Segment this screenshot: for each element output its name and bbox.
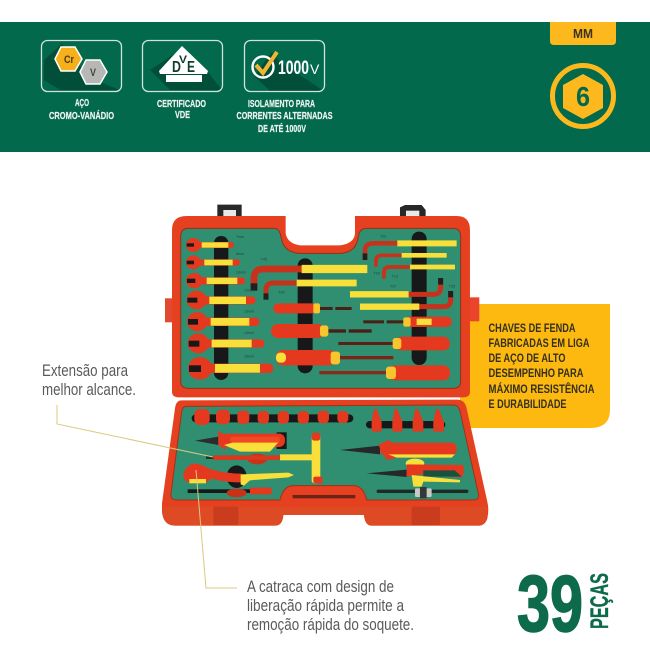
size labels (236, 235, 455, 359)
size labels: 7mm (236, 235, 244, 239)
badge: chrome vanadium steel: Cr (64, 54, 75, 66)
text: VDE certified: CERTIFICADO (157, 99, 206, 110)
text: VDE certified (157, 99, 206, 121)
black slots (214, 232, 427, 380)
callout: yellow panel screwdrivers: DE AÇO DE ALTO (488, 351, 566, 365)
text: chrome vanadium steel (49, 98, 114, 122)
leader line: extension (57, 405, 213, 457)
piece count: PEÇAS (586, 573, 614, 629)
text: extension: Extensão para (42, 361, 128, 380)
lower band shade (162, 507, 487, 526)
wrenches (186, 238, 273, 380)
bit sockets (366, 409, 445, 432)
badge: VDE certified: V (179, 54, 188, 66)
pliers right bottom (367, 464, 464, 487)
text: extension: melhor alcance. (42, 380, 136, 399)
tab: MM: MM (573, 27, 593, 41)
lid shell (172, 216, 470, 397)
text: ratchet (247, 577, 414, 634)
badge: VDE certified: D (172, 59, 181, 76)
size labels: T10 (392, 274, 398, 278)
size labels: T30 (278, 290, 285, 294)
tab: MM (550, 22, 616, 45)
pliers right top (340, 440, 457, 468)
case foam (171, 405, 479, 500)
icon: 6 mm hexagon: 6 (576, 81, 590, 112)
text: chrome vanadium steel: AÇO (75, 98, 89, 109)
text: ratchet: remoção rápida do soquete. (247, 615, 414, 634)
size labels: T20 (380, 235, 386, 239)
handle recess (293, 495, 355, 498)
text: ratchet: A catraca com design de (247, 577, 394, 596)
size labels: T25 (449, 284, 455, 288)
badge: 1000V insulation: V (310, 61, 320, 77)
icon: 6 mm hexagon (552, 66, 614, 126)
text: 1000V insulation: ISOLAMENTO PARA (248, 99, 315, 110)
badge: chrome vanadium steel: V (90, 67, 97, 79)
callout: yellow panel screwdrivers: FABRICADAS EM LIGA (488, 336, 590, 350)
callout: yellow panel screwdrivers: CHAVES DE FENDA (488, 321, 576, 335)
side tabs (165, 297, 479, 322)
size labels: 13mm (244, 310, 254, 314)
text: 1000V insulation: DE ATÉ 1000V (258, 122, 306, 135)
callout: yellow panel screwdrivers: E DURABILIDADE (488, 397, 566, 411)
socket row (192, 409, 353, 425)
clasps (213, 507, 440, 525)
extension bar and T-handle (206, 433, 323, 483)
lower case with tools (162, 400, 488, 526)
size labels: T27 (390, 284, 396, 288)
size labels: T15 (373, 272, 380, 276)
case shell (162, 400, 488, 526)
upper case lid with tools (165, 205, 479, 397)
text: ratchet: liberação rápida permite a (247, 596, 404, 615)
piece count: 39 (517, 559, 583, 648)
callout: yellow panel screwdrivers: DESEMPENHO PARA (488, 366, 584, 380)
badge: VDE certified: E (187, 59, 195, 76)
size labels: 12mm (244, 289, 254, 293)
ratchet (183, 463, 294, 488)
size labels: T45 (261, 258, 267, 262)
badge: chrome vanadium steel (42, 40, 122, 92)
text: 1000V insulation: CORRENTES ALTERNADAS (236, 111, 333, 122)
badge: VDE certified (142, 40, 222, 92)
size labels: 15mm (244, 355, 254, 359)
text: chrome vanadium steel: CROMO-VANÁDIO (49, 109, 114, 122)
pliers left (195, 431, 287, 464)
text: 1000V insulation (236, 99, 333, 135)
lower extension (188, 488, 272, 497)
text: extension (42, 361, 136, 399)
lid foam (181, 228, 461, 388)
size labels: 10mm (236, 270, 246, 274)
screwdrivers (271, 303, 452, 380)
callout: yellow panel screwdrivers: MÁXIMO RESISTÊNCIA (488, 381, 595, 396)
badge: 1000V insulation: 1000 (278, 58, 309, 79)
callout: yellow panel screwdrivers (460, 304, 610, 428)
header band (0, 22, 650, 152)
size labels: 8mm (236, 252, 244, 256)
latches (217, 205, 426, 221)
badge: 1000V insulation (244, 40, 324, 92)
size labels: 14mm (244, 331, 254, 335)
leader line: ratchet (196, 470, 237, 588)
hex keys (254, 243, 457, 307)
text: VDE certified: VDE (175, 110, 190, 121)
long bit tool (377, 487, 468, 498)
